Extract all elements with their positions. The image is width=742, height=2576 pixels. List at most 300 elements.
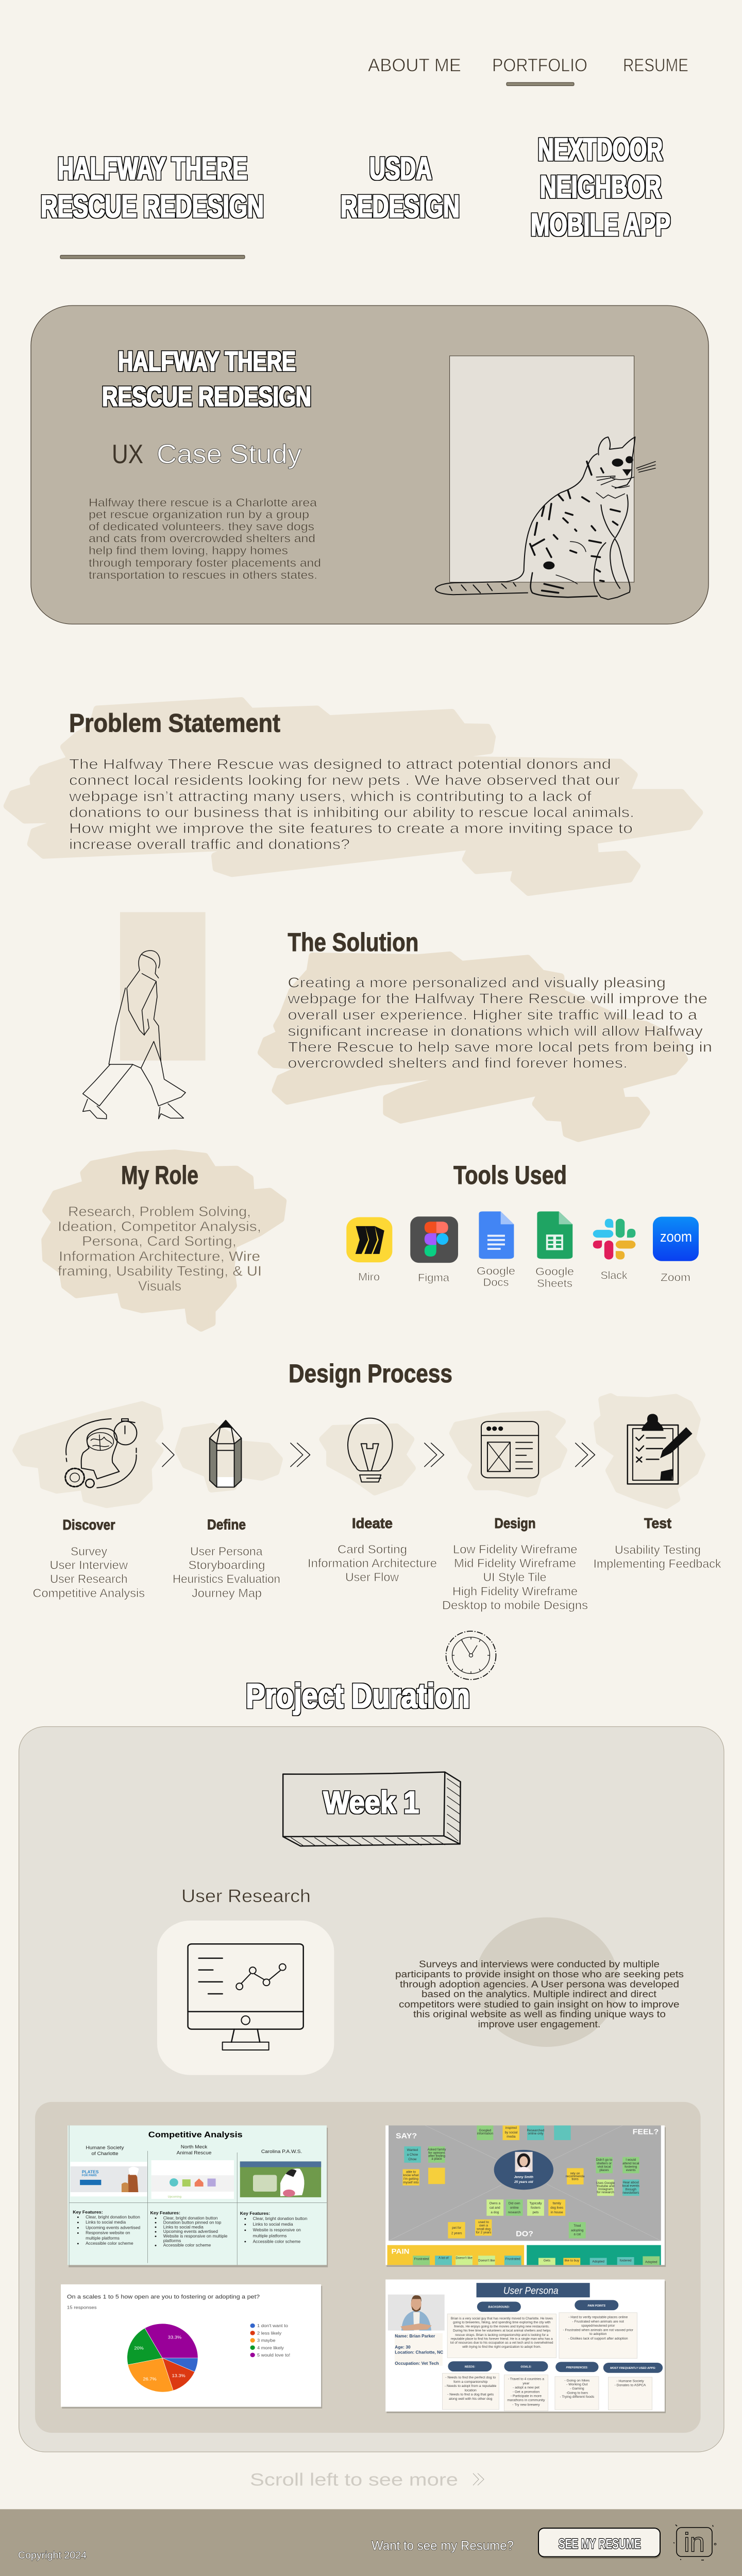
artifact: user persona: User Persona bbox=[503, 2285, 559, 2296]
title: project duration: Project Duration bbox=[246, 1677, 470, 1715]
sticky note labels: for opinions bbox=[428, 2151, 445, 2155]
hero description: transportation to rescues in others states. bbox=[89, 569, 317, 581]
panel: project duration bbox=[19, 1726, 724, 2452]
tab: nextdoor neighbor mobile app: MOBILE APP bbox=[531, 208, 670, 243]
step: test: Implementing Feedback bbox=[593, 1558, 721, 1571]
pain and gain strips: Frustrated bbox=[414, 2258, 429, 2261]
step: ideate: User Flow bbox=[345, 1571, 399, 1584]
sticky note labels: Didn't go to bbox=[596, 2158, 613, 2162]
step: ideate: Ideate bbox=[352, 1515, 393, 1532]
sticky note labels: information bbox=[477, 2132, 493, 2136]
pain and gain strips: Frustrated bbox=[505, 2258, 520, 2261]
sticky note labels: research bbox=[508, 2211, 520, 2214]
persona text boxes bbox=[442, 2313, 652, 2411]
artifact: survey pie chart: On a scales 1 to 5 how open are you to fostering or adopting a pet? bbox=[67, 2293, 260, 2300]
artifact: user persona: - Dislikes lack of support after adoption bbox=[568, 2337, 628, 2341]
sticky note labels: own a bbox=[479, 2224, 488, 2228]
pain and gain strips: Doesn't like bbox=[478, 2259, 495, 2262]
sticky note labels: for research bbox=[597, 2191, 614, 2194]
artifact: user persona: BACKGROUND: bbox=[488, 2306, 510, 2309]
tool labels: Docs bbox=[483, 1276, 509, 1289]
sticky note labels: Wanted bbox=[407, 2148, 418, 2152]
tool labels: Sheets bbox=[537, 1277, 572, 1290]
pain and gain strips: Doesn't like bbox=[456, 2257, 473, 2260]
artifact: user persona: - Travel to 4 countries a bbox=[508, 2378, 544, 2381]
section: design process bbox=[16, 1359, 721, 1613]
artifact: competitive analysis: Accessible color scheme bbox=[86, 2241, 133, 2246]
artifact: competitive analysis: Website is responsive on bbox=[253, 2228, 301, 2232]
step: design: Mid Fidelity Wireframe bbox=[454, 1557, 576, 1570]
role list bbox=[58, 1204, 262, 1294]
artifact: competitive analysis: multiple platforms bbox=[86, 2236, 120, 2241]
sticky note labels: online bbox=[510, 2206, 519, 2210]
hero description: pet rescue organization run by a group bbox=[89, 509, 309, 521]
artifact: competitive analysis: Humane Society bbox=[86, 2145, 124, 2151]
pain and gain strips: PAIN bbox=[392, 2248, 410, 2256]
brush background bbox=[7, 701, 699, 892]
tab: halfway there rescue redesign: RESCUE REDESIGN bbox=[41, 189, 264, 224]
artifact: user persona: - Working Out bbox=[566, 2383, 588, 2386]
artifact: competitive analysis: of Charlotte bbox=[91, 2151, 119, 2157]
step: discover: Competitive Analysis bbox=[32, 1587, 145, 1600]
artifact: user persona: year bbox=[522, 2382, 530, 2385]
artifact: user persona: reputable place to find his forever friend. He is a single man who has a bbox=[451, 2337, 553, 2341]
role list: Ideation, Competitor Analysis, bbox=[58, 1218, 261, 1234]
solution text: There Rescue to help save more local pets from being in bbox=[288, 1039, 712, 1055]
user research description: participants to provide insight on those who are seeking pets bbox=[395, 1969, 684, 1979]
icon: linkedin bbox=[673, 2524, 716, 2560]
artifact: competitive analysis: PLATES bbox=[82, 2170, 99, 2174]
tool labels: Google bbox=[477, 1264, 515, 1277]
artifact: competitive analysis: Carolina P.A.W.S. bbox=[261, 2149, 302, 2155]
hero title: RESCUE REDESIGN bbox=[102, 381, 311, 412]
copyright: Copyright 2024 bbox=[18, 2550, 87, 2561]
persona profile: Age: 30 bbox=[395, 2345, 411, 2349]
nav active underline bbox=[507, 82, 574, 86]
problem text: donations to our business that is inhibiting our ability to rescue local animals. bbox=[69, 804, 634, 821]
user research description: through adoption agencies. A User persona was developed bbox=[400, 1979, 679, 1989]
week 1 badge: Week 1 bbox=[323, 1785, 419, 1820]
pain and gain strips: Adopted bbox=[592, 2260, 604, 2263]
pie chart slices bbox=[127, 2324, 198, 2392]
sticky note labels: I would bbox=[626, 2158, 636, 2162]
tab: halfway there rescue redesign: HALFWAY THERE bbox=[58, 151, 247, 187]
artifact: user persona: friends. He enjoys going to the movies and trying new restaurants. bbox=[454, 2325, 550, 2329]
persona profile: Name: Brian Parker bbox=[395, 2334, 435, 2338]
step: discover: User Research bbox=[50, 1573, 128, 1586]
icon: figma bbox=[410, 1216, 458, 1263]
step: ideate bbox=[308, 1515, 437, 1584]
persona profile: Location: Charlotte, NC bbox=[395, 2350, 443, 2355]
sticky note labels: fostering bbox=[625, 2165, 637, 2169]
artifact: empathy map: DO? bbox=[516, 2230, 533, 2239]
artifact: competitive analysis: Links to social media bbox=[163, 2225, 204, 2229]
sticky note labels: Asked family bbox=[428, 2148, 446, 2151]
sticky note labels: online only bbox=[528, 2132, 544, 2136]
artifact: competitive analysis: Responsive website on bbox=[86, 2231, 130, 2235]
button: see my resume: SEE MY RESUME bbox=[559, 2536, 641, 2551]
artifact: competitive analysis: platforms bbox=[163, 2239, 181, 2243]
user research description: competitors were studied to gain insight on how to improve bbox=[399, 1999, 680, 2010]
artifact: user persona: - Needs to find the perfect dog to bbox=[445, 2376, 496, 2379]
artifact: competitive analysis: Donation button pinned on top bbox=[163, 2221, 222, 2225]
persona photo bbox=[388, 2295, 445, 2331]
nav link: resume: RESUME bbox=[623, 55, 688, 75]
problem text: The Halfway There Rescue was designed to attract potential donors and bbox=[69, 756, 611, 772]
step: design: Design bbox=[495, 1515, 536, 1532]
sticky note labels: Uses Google bbox=[596, 2181, 615, 2185]
sticky note labels: newsletters bbox=[622, 2191, 639, 2195]
pain and gain strips: Gets bbox=[544, 2259, 550, 2262]
sticky note labels: able to bbox=[406, 2171, 416, 2174]
heading: Tools Used bbox=[453, 1161, 567, 1190]
step: test bbox=[593, 1515, 721, 1571]
hero description: Halfway there rescue is a Charlotte area bbox=[89, 496, 317, 509]
tab: nextdoor neighbor mobile app bbox=[531, 132, 670, 243]
process brush backgrounds bbox=[16, 1397, 702, 1505]
tool labels: Google bbox=[535, 1265, 574, 1278]
artifact: competitive analysis: multiple platforms bbox=[253, 2234, 287, 2238]
sticky note labels: events bbox=[626, 2168, 636, 2172]
artifact: user persona: - Going on hikes bbox=[564, 2379, 590, 2382]
sticky note labels: visit local bbox=[598, 2165, 611, 2169]
step: define: User Persona bbox=[190, 1545, 263, 1558]
sticky note labels: know what bbox=[403, 2174, 419, 2177]
sticky note labels: a Chow bbox=[407, 2153, 418, 2157]
step: design: Desktop to mobile Designs bbox=[442, 1599, 588, 1613]
artifact: survey pie chart: 26.7% bbox=[143, 2377, 157, 2382]
step: design: Low Fidelity Wireframe bbox=[453, 1544, 577, 1556]
tab: usda redesign: USDA bbox=[369, 151, 432, 187]
step: design bbox=[442, 1515, 588, 1613]
hero description bbox=[89, 496, 321, 581]
artifact: user persona: NEEDS: bbox=[465, 2366, 475, 2368]
sticky note labels: pets bbox=[533, 2211, 538, 2214]
artifact: user persona: - Donates to ASPCA bbox=[615, 2384, 646, 2387]
icon: define pencil bbox=[210, 1420, 241, 1487]
project tabs bbox=[41, 132, 670, 259]
artifact: competitive analysis: Competitive Analysis bbox=[148, 2130, 243, 2139]
solution text bbox=[287, 975, 712, 1071]
step: define: Heuristics Evaluation bbox=[173, 1573, 280, 1586]
sticky note labels: recommenda bbox=[566, 2175, 585, 2178]
artifact: user persona: - Needs to find a dog that gets bbox=[447, 2393, 494, 2396]
chart legend: 5 would love to! bbox=[257, 2352, 290, 2358]
artifact: competitive analysis: Key Features: bbox=[73, 2210, 103, 2214]
sticky note labels: for 2 years bbox=[476, 2231, 491, 2234]
user research description: Surveys and interviews were conducted by multiple bbox=[419, 1959, 660, 1970]
hero description: and cats from overcrowded shelters and bbox=[89, 532, 315, 545]
hero title bbox=[102, 345, 311, 412]
artifact: user persona: PAIN POINTS bbox=[587, 2304, 605, 2308]
pain and gain strips: Adopted bbox=[645, 2261, 657, 2264]
card: research icon bbox=[157, 1921, 334, 2075]
tab: halfway there rescue redesign bbox=[41, 151, 264, 224]
icon: test clipboard bbox=[628, 1414, 693, 1484]
icon: chevrons bbox=[576, 1443, 595, 1467]
persona profile bbox=[395, 2333, 443, 2366]
pain and gain strips bbox=[387, 2245, 661, 2265]
artifact: user persona: marathons in community bbox=[507, 2399, 545, 2402]
sticky note labels: Did own bbox=[509, 2201, 520, 2205]
sticky note labels: by social bbox=[505, 2131, 517, 2134]
tab: nextdoor neighbor mobile app: NEXTDOOR bbox=[538, 132, 663, 167]
icon: google docs bbox=[479, 1211, 514, 1259]
sticky note labels: dog lives bbox=[550, 2206, 563, 2210]
sticky note labels: a place bbox=[431, 2157, 442, 2161]
illustration backdrop bbox=[120, 912, 206, 1061]
sticky note labels: family bbox=[552, 2201, 562, 2205]
artifact: user persona: to adoption bbox=[589, 2332, 607, 2336]
sticky note labels: Hear about bbox=[623, 2181, 639, 2184]
role list: Research, Problem Solving, bbox=[68, 1204, 251, 1219]
brush background bbox=[45, 1153, 283, 1328]
artifact: competitive analysis: Key Features: bbox=[240, 2211, 270, 2216]
button: see my resume bbox=[538, 2528, 661, 2558]
artifact: user persona: PREFERENCES: bbox=[566, 2366, 588, 2369]
step: discover: Discover bbox=[62, 1517, 115, 1533]
artifact: competitive analysis: Clear, bright donation button bbox=[163, 2216, 217, 2221]
artifact: user persona: - Trying different foods bbox=[560, 2395, 595, 2399]
artifact: user persona: - Participate in more bbox=[511, 2395, 542, 2398]
artifact: user persona: - Get a promotion bbox=[513, 2391, 539, 2394]
artifact: competitive analysis: Accessible color scheme bbox=[253, 2240, 301, 2244]
artifact: competitive analysis bbox=[68, 2125, 328, 2267]
solution text: significant increase in donations which will allow Halfway bbox=[288, 1023, 703, 1039]
heading: The Solution bbox=[288, 928, 418, 957]
section: my role bbox=[45, 1153, 283, 1328]
tool labels: Zoom bbox=[661, 1271, 690, 1283]
artifact: competitive analysis: Accessible color scheme bbox=[163, 2243, 211, 2247]
tool labels: Figma bbox=[418, 1271, 450, 1284]
sticky note labels: used to bbox=[478, 2221, 489, 2224]
artifact: competitive analysis: Key Features: bbox=[150, 2210, 180, 2215]
section: problem statement bbox=[7, 701, 699, 892]
illustration: walking woman bbox=[83, 951, 185, 1119]
artifact: survey pie chart: 33.3% bbox=[168, 2335, 181, 2340]
artifact: user persona: During his free time he volunteers at local animal shelters and helps bbox=[453, 2329, 551, 2332]
nav link: portfolio: PORTFOLIO bbox=[492, 55, 587, 75]
icon: monitor with chart bbox=[188, 1944, 303, 2050]
sticky note labels: a cat bbox=[574, 2233, 581, 2236]
icon: zoom bbox=[653, 1217, 699, 1261]
sticky note labels: myself into bbox=[403, 2181, 419, 2184]
heading: My Role bbox=[121, 1161, 198, 1190]
sticky note labels: fosters bbox=[531, 2206, 541, 2210]
hero title: HALFWAY THERE bbox=[118, 345, 296, 377]
solution text: overall user experience. Higher site traffic will lead to a bbox=[288, 1007, 697, 1023]
sticky note labels: Researched bbox=[527, 2129, 544, 2132]
artifact: user persona: - Frustrated when animals are not bbox=[572, 2320, 624, 2324]
artifact: competitive analysis: Clear, bright donation button bbox=[253, 2216, 307, 2221]
sticky note labels: a dog bbox=[491, 2211, 499, 2214]
step: design: UI Style Tile bbox=[483, 1571, 546, 1584]
artifact: user persona: going to breweries, hiking, and spending time exploring the city with bbox=[453, 2321, 551, 2325]
icon: zoom: zoom bbox=[660, 1228, 692, 1245]
pain and gain strips: fostered bbox=[620, 2259, 632, 2263]
step: define bbox=[173, 1517, 280, 1600]
sticky note labels: rely on bbox=[570, 2172, 580, 2176]
sticky note labels: small dog bbox=[477, 2228, 491, 2231]
role list: Persona, Card Sorting, bbox=[82, 1233, 237, 1249]
hero description: help find them loving, happy homes bbox=[89, 544, 288, 557]
user research description: improve user engagement. bbox=[478, 2019, 600, 2029]
artifact: survey pie chart: 13.3% bbox=[172, 2373, 185, 2378]
step: ideate: Information Architecture bbox=[308, 1557, 437, 1570]
icon: chevron bbox=[162, 1443, 174, 1467]
icons: process steps bbox=[65, 1414, 693, 1488]
artifact: user persona: Brian is a very social guy that has recently moved to Charlotte. He loves bbox=[451, 2317, 553, 2320]
icon: clock bbox=[446, 1631, 496, 1680]
tool labels: Miro bbox=[358, 1270, 380, 1283]
artifact: competitive analysis: North Meck bbox=[181, 2144, 207, 2150]
role list: Information Architecture, Wire bbox=[59, 1248, 260, 1264]
icon: miro bbox=[346, 1217, 392, 1262]
artifact: user persona: rescue strays. Brian is lacking companionship and is looking for a bbox=[455, 2333, 549, 2337]
week 1 badge bbox=[283, 1772, 461, 1846]
role list: Visuals bbox=[138, 1278, 181, 1294]
hero description: through temporary foster placements and bbox=[89, 556, 321, 569]
artifact: user persona: - Hard to verify reputable places online bbox=[568, 2316, 628, 2319]
step: test: Test bbox=[644, 1515, 671, 1532]
subtitle: ux case study: Case Study bbox=[157, 439, 301, 469]
sticky note labels: I'm getting bbox=[403, 2177, 418, 2181]
icon: design wireframe bbox=[481, 1421, 538, 1478]
solution text: Creating a more personalized and visually pleasing bbox=[288, 975, 666, 991]
tab: usda redesign: REDESIGN bbox=[341, 189, 460, 224]
step: discover: Survey bbox=[71, 1545, 107, 1558]
artifact: competitive analysis: Upcoming events advertised bbox=[163, 2229, 218, 2234]
sticky note labels bbox=[403, 2126, 639, 2236]
sticky note labels: places bbox=[599, 2168, 609, 2172]
sticky note labels: tions bbox=[571, 2178, 579, 2181]
artifact: user persona: - Try new brewery bbox=[512, 2403, 540, 2406]
sticky note labels: shelters or bbox=[597, 2162, 612, 2165]
section: the solution bbox=[83, 912, 712, 1139]
artifact: survey pie chart: 20% bbox=[134, 2346, 144, 2351]
artifact: user persona: along well with his other dog bbox=[449, 2397, 493, 2401]
sticky note labels: Youtube and bbox=[596, 2184, 615, 2188]
step: design: High Fidelity Wireframe bbox=[452, 1585, 578, 1598]
sticky note labels: 2 years bbox=[451, 2232, 462, 2235]
artifact: survey pie chart bbox=[61, 2284, 322, 2409]
sticky note labels: through bbox=[626, 2188, 636, 2191]
artifact: competitive analysis: Clear, bright donation button bbox=[86, 2215, 140, 2219]
pain and gain strips: A lot of bbox=[439, 2257, 449, 2260]
sticky note labels: local events bbox=[622, 2184, 639, 2188]
section: tools used bbox=[346, 1161, 699, 1290]
hero description: of dedicated volunteers. they save dogs bbox=[89, 520, 314, 533]
step: define: Journey Map bbox=[192, 1587, 262, 1600]
problem text: increase overall traffic and donations? bbox=[69, 837, 350, 853]
navigation bar bbox=[368, 55, 688, 86]
sticky note labels: Owns a bbox=[490, 2201, 501, 2205]
artifact: survey pie chart: 15 responses bbox=[67, 2305, 97, 2310]
user research description bbox=[395, 1959, 684, 2029]
nav link: about me: ABOUT ME bbox=[368, 55, 461, 75]
chart legend: 1 don't want to bbox=[257, 2324, 288, 2328]
chart legend: 3 maybe bbox=[257, 2338, 275, 2343]
artifact: empathy map: SAY? bbox=[396, 2132, 417, 2140]
brush background bbox=[261, 955, 684, 1139]
icon: ideate bulb bbox=[348, 1418, 393, 1482]
hero image backdrop bbox=[450, 356, 634, 582]
heading: Design Process bbox=[289, 1359, 452, 1388]
step: ideate: Card Sorting bbox=[338, 1544, 407, 1556]
step: discover bbox=[32, 1517, 145, 1600]
heading: Problem Statement bbox=[69, 708, 280, 737]
artifact: user persona: - Frustrated when animals are not vaxxed prior bbox=[563, 2329, 634, 2332]
icon: google sheets bbox=[537, 1211, 572, 1259]
problem text: webpage isn’t attracting many users, which is contributing to a lack of bbox=[69, 788, 592, 805]
sticky note labels: inspired bbox=[505, 2126, 517, 2130]
artifact: user persona: MOST FREQUENTLY USED APPS: bbox=[610, 2367, 656, 2370]
sticky note labels: Chow bbox=[408, 2158, 417, 2161]
artifact: user persona: GOALS: bbox=[520, 2366, 532, 2368]
artifact: user persona: - Gaming bbox=[570, 2387, 584, 2391]
step: test: Usability Testing bbox=[615, 1544, 701, 1557]
artifact: user persona: spayed/neutered prior bbox=[581, 2324, 615, 2328]
panel: research artifacts bbox=[35, 2102, 701, 2433]
artifact: competitive analysis: Animal Rescue bbox=[177, 2150, 211, 2156]
persona pills bbox=[448, 2300, 663, 2373]
icon: discover head bbox=[65, 1419, 137, 1488]
scroll hint: Scroll left to see more bbox=[250, 2470, 458, 2489]
chart legend bbox=[250, 2324, 290, 2358]
chart legend: 2 less likely bbox=[257, 2331, 282, 2335]
heading: user research: User Research bbox=[181, 1886, 311, 1906]
sticky note labels: Googled bbox=[479, 2129, 491, 2132]
artifact: user persona: - Needs to adopt from a reputable bbox=[445, 2384, 497, 2388]
active tab underline bbox=[60, 255, 245, 259]
persona profile: Occupation: Vet Tech bbox=[395, 2361, 439, 2366]
sticky note labels: media bbox=[507, 2135, 516, 2139]
step: define: Define bbox=[207, 1517, 246, 1533]
user research description: based on the analytics. Multiple indirect and direct bbox=[421, 1989, 657, 1999]
artifact: competitive analysis: Upcoming bbox=[168, 2196, 181, 2199]
subtitle: ux case study: UX bbox=[112, 439, 143, 469]
chart legend: 4 more likely bbox=[257, 2345, 284, 2350]
sticky note labels: Typically bbox=[529, 2201, 543, 2205]
artifact: competitive analysis: Links to social media bbox=[86, 2220, 126, 2225]
sticky note labels: Tried bbox=[574, 2224, 581, 2228]
sticky note labels: in house bbox=[551, 2211, 563, 2214]
artifact: user persona: with trying to find the right organization to adopt from. bbox=[462, 2345, 542, 2349]
icon: slack bbox=[593, 1219, 635, 1260]
artifact: competitive analysis: Website is responsive on multiple bbox=[163, 2234, 228, 2239]
artifact: empathy map: 25 years old bbox=[514, 2180, 533, 2184]
solution text: overcrowded shelters and find forever homes. bbox=[288, 1055, 628, 1071]
problem text: How might we improve the site features to create a more inviting space to bbox=[69, 820, 633, 837]
solution text: webpage for the Halfway There Rescue will improve the bbox=[287, 991, 707, 1007]
footer bbox=[0, 2509, 742, 2576]
artifact: user persona: -Going to bars bbox=[566, 2392, 588, 2395]
user research description: this original website as well as finding unique ways to bbox=[413, 2009, 666, 2019]
sticky note labels: adopting bbox=[571, 2229, 583, 2232]
artifact: competitive analysis: FOR PAWS bbox=[82, 2174, 97, 2177]
panel: hero case study bbox=[31, 306, 709, 624]
resume prompt: Want to see my Resume? bbox=[372, 2539, 514, 2553]
circle backdrop bbox=[475, 1917, 618, 2047]
artifact: empathy map: Jenny Smith bbox=[514, 2176, 533, 2179]
artifact: user persona: form a companionship bbox=[453, 2380, 488, 2384]
role list: framing, Usability Testing, & UI bbox=[58, 1263, 262, 1279]
artifact: user persona: location bbox=[465, 2389, 477, 2393]
artifact: user persona bbox=[385, 2279, 666, 2413]
illustration: sitting cat bbox=[435, 437, 655, 600]
artifact: user persona: - adopt a new pet bbox=[513, 2386, 539, 2389]
step: define: Storyboarding bbox=[188, 1559, 265, 1572]
